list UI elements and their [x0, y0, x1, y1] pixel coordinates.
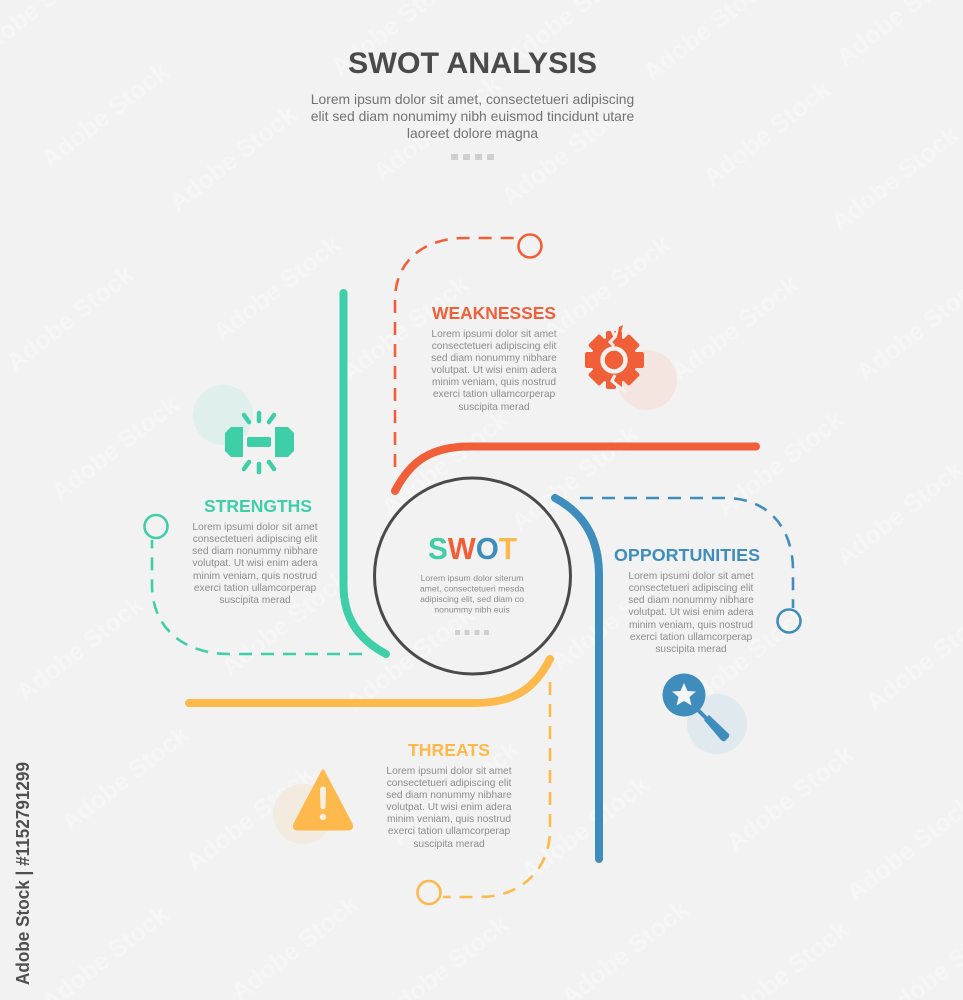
strengths bar — [344, 293, 386, 654]
opportunities heading: OPPORTUNITIES — [614, 545, 760, 565]
opportunities text: minim veniam, quis nostrud — [629, 620, 753, 631]
icon: warning triangle — [294, 771, 352, 829]
watermark pattern: Adobe Stock — [164, 101, 302, 217]
strengths dashed connector — [152, 540, 362, 654]
strengths heading: STRENGTHS — [204, 496, 312, 516]
subtitle text: Lorem ipsum dolor sit amet, consectetueri adipiscing — [311, 91, 634, 107]
weaknesses dashed connector — [395, 238, 517, 467]
weaknesses text: minim veniam, quis nostrud — [432, 377, 556, 388]
watermark pattern: Adobe Stock — [496, 96, 634, 212]
watermark pattern: Adobe Stock — [216, 566, 354, 682]
watermark pattern: Adobe Stock — [376, 406, 514, 522]
opportunities text: Lorem ipsumi dolor sit amet — [628, 571, 754, 582]
center SWOT heading: SWOT — [428, 531, 517, 566]
opportunities dashed connector — [580, 498, 793, 608]
icon: dumbbell — [225, 413, 294, 472]
watermark pattern: Adobe Stock — [711, 406, 849, 522]
weaknesses heading: WEAKNESSES — [432, 303, 556, 323]
watermark pattern: Adobe Stock — [676, 601, 814, 717]
subtitle text — [311, 91, 635, 141]
threats text: consectetueri adipiscing elit — [387, 778, 511, 789]
strengths text — [192, 522, 318, 606]
weaknesses text: Lorem ipsumi dolor sit amet — [431, 329, 557, 340]
watermark pattern: Adobe Stock — [368, 71, 506, 187]
watermark pattern: Adobe Stock — [538, 231, 676, 347]
threats bar — [189, 659, 550, 703]
weaknesses text: consectetueri adipiscing elit — [432, 341, 556, 352]
watermark pattern: Adobe Stock — [516, 771, 654, 887]
center text — [420, 573, 524, 614]
center dots — [455, 630, 489, 635]
opportunities text: volutpat. Ut wisi enim adera — [628, 607, 754, 618]
threats text — [386, 766, 512, 850]
opportunities text: exerci tation ullamcorperap — [630, 632, 752, 643]
panel: center circle — [374, 478, 570, 674]
watermark pattern: Adobe Stock — [1, 261, 139, 377]
opportunities icon backdrop — [687, 694, 747, 754]
weaknesses text: suscipita merad — [458, 402, 530, 413]
threats marker circle — [418, 881, 440, 904]
watermark pattern: Adobe Stock — [181, 761, 319, 877]
threats text: minim veniam, quis nostrud — [387, 814, 511, 825]
watermark pattern: Adobe Stock — [721, 741, 859, 857]
watermark pattern: Adobe Stock — [506, 421, 644, 537]
panel: strengths — [144, 293, 386, 654]
icon: broken gear — [585, 325, 644, 392]
watermark pattern: Adobe Stock — [386, 736, 524, 852]
center text: nonummy nibh euis — [434, 604, 510, 614]
panel: weaknesses — [395, 234, 756, 491]
strengths text: consectetueri adipiscing elit — [193, 534, 317, 545]
panel: threats — [189, 659, 550, 904]
strengths text: suscipita merad — [219, 595, 291, 606]
center ring — [374, 478, 570, 674]
strengths text: exerci tation ullamcorperap — [194, 583, 316, 594]
strengths text: volutpat. Ut wisi enim adera — [192, 558, 318, 569]
watermark pattern: Adobe Stock — [341, 601, 479, 717]
center text: adipiscing elit, sed diam co — [420, 594, 524, 604]
watermark pattern: Adobe Stock — [56, 721, 194, 837]
threats icon backdrop — [273, 784, 333, 844]
opportunities text: suscipita merad — [655, 644, 727, 655]
threats heading: THREATS — [408, 740, 490, 760]
center text: Lorem ipsum dolor siterum — [421, 573, 523, 583]
opportunities text: sed diam nonummy nibhare — [628, 595, 754, 606]
subtitle text: laoreet dolore magna — [407, 125, 538, 141]
watermark pattern: Adobe Stock — [46, 391, 184, 507]
threats text: volutpat. Ut wisi enim adera — [386, 802, 512, 813]
weaknesses text — [431, 329, 557, 413]
weaknesses bar — [395, 446, 756, 491]
title dots — [451, 154, 494, 160]
strengths marker circle — [144, 515, 168, 538]
panel: opportunities — [555, 498, 800, 859]
weaknesses text: sed diam nonummy nibhare — [431, 353, 557, 364]
watermark pattern: Adobe Stock — [36, 58, 174, 174]
watermark pattern: Adobe Stock — [336, 271, 474, 387]
subtitle text: elit sed diam nonumimy nibh euismod tincidunt utare — [311, 108, 635, 124]
watermark pattern: Adobe Stock — [698, 76, 836, 192]
title: SWOT ANALYSIS — [348, 47, 597, 80]
watermark pattern: Adobe Stock — [208, 231, 346, 347]
center text: amet, consectetueri mesda — [420, 584, 524, 594]
threats dashed connector — [443, 682, 550, 897]
watermark pattern: Adobe Stock — [826, 121, 963, 237]
strengths text: Lorem ipsumi dolor sit amet — [192, 522, 318, 533]
threats text: exerci tation ullamcorperap — [388, 826, 510, 837]
strengths icon backdrop — [193, 385, 253, 445]
threats text: sed diam nonummy nibhare — [386, 790, 512, 801]
stock id label: Adobe Stock | #1152791299 — [13, 762, 33, 985]
opportunities bar — [555, 498, 599, 859]
watermark pattern: Adobe Stock — [11, 591, 149, 707]
watermark pattern: Adobe Stock — [546, 561, 684, 677]
watermark pattern: Adobe Stock — [666, 271, 804, 387]
icon: magnifier with star — [662, 674, 729, 741]
threats text: Lorem ipsumi dolor sit amet — [386, 766, 512, 777]
opportunities marker circle — [778, 610, 800, 632]
weaknesses text: volutpat. Ut wisi enim adera — [431, 365, 557, 376]
weaknesses text: exerci tation ullamcorperap — [433, 389, 555, 400]
weaknesses icon backdrop — [617, 350, 677, 410]
strengths text: sed diam nonummy nibhare — [192, 546, 318, 557]
weaknesses marker circle — [518, 234, 542, 258]
opportunities text — [628, 571, 754, 655]
threats text: suscipita merad — [413, 839, 485, 850]
strengths text: minim veniam, quis nostrud — [193, 571, 317, 582]
opportunities text: consectetueri adipiscing elit — [629, 583, 753, 594]
